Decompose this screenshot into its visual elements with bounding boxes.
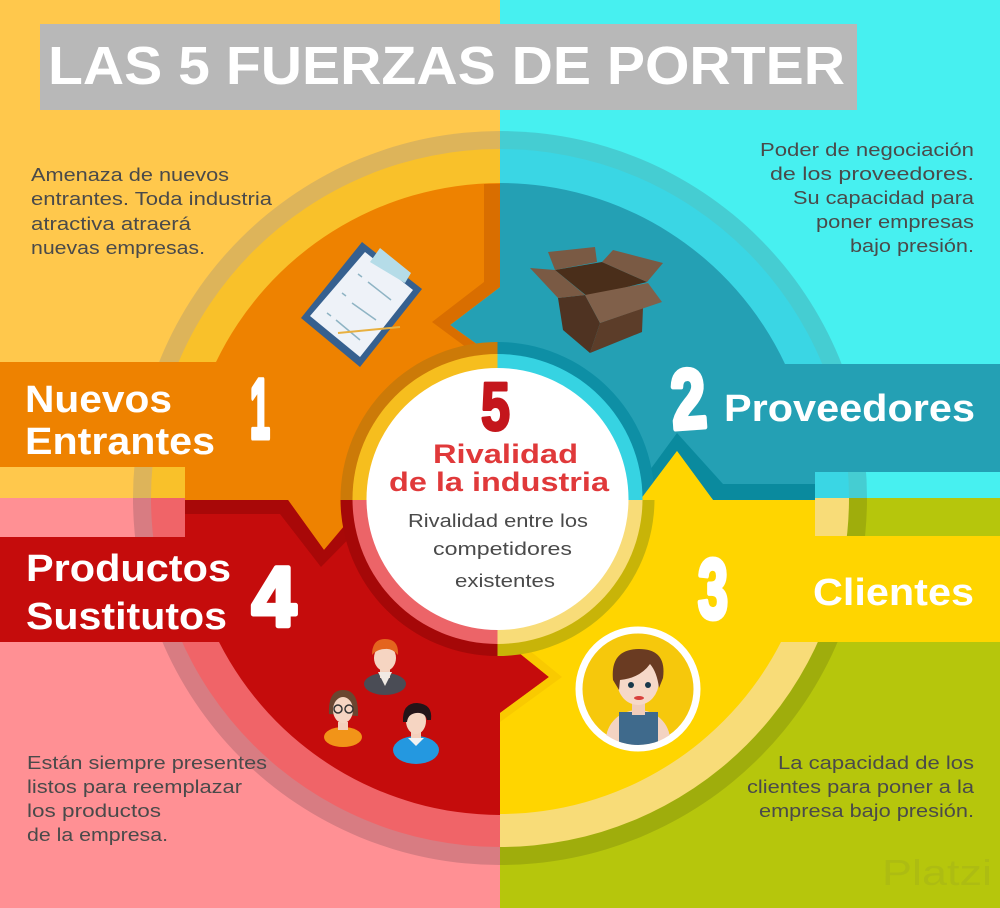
text block: proveedores description: de los proveedores. bbox=[770, 164, 974, 184]
text block: productos sustitutos description: listos para reemplazar bbox=[27, 777, 242, 797]
text block: productos sustitutos description: de la empresa. bbox=[27, 825, 168, 845]
icon: client portrait bbox=[579, 630, 697, 770]
heading: clientes: Clientes bbox=[813, 572, 974, 614]
watermark: Platzi bbox=[882, 852, 992, 893]
heading: productos sustitutos bbox=[26, 548, 231, 638]
icon: three people bbox=[324, 639, 439, 764]
text block: nuevos entrantes description bbox=[31, 165, 273, 258]
person: man in blue bbox=[393, 703, 439, 764]
text block: nuevos entrantes description: entrantes. Toda industria bbox=[31, 189, 273, 209]
text block: productos sustitutos description: los productos bbox=[27, 801, 161, 821]
outer ring bbox=[133, 131, 867, 865]
person: man in suit bbox=[364, 639, 406, 695]
heading: productos sustitutos: Productos bbox=[26, 548, 231, 590]
panel: proveedores shape bbox=[450, 183, 1000, 498]
title: LAS 5 FUERZAS DE PORTER bbox=[48, 36, 845, 96]
center ring bbox=[340, 342, 713, 656]
text block: clientes description: La capacidad de los bbox=[778, 753, 974, 773]
number 2: 2 bbox=[668, 351, 709, 447]
number 4: 4 bbox=[252, 550, 296, 644]
text block: clientes description: clientes para poner a la bbox=[747, 777, 975, 797]
center description: competidores bbox=[433, 539, 572, 559]
text block: proveedores description: bajo presión. bbox=[850, 236, 974, 256]
number 3: 3 bbox=[698, 542, 728, 636]
text block: proveedores description bbox=[760, 140, 975, 256]
text block: proveedores description: Poder de negociación bbox=[760, 140, 974, 160]
text block: productos sustitutos description bbox=[27, 753, 267, 845]
text block: proveedores description: Su capacidad para bbox=[793, 188, 975, 208]
heading: nuevos entrantes: Entrantes bbox=[25, 421, 215, 463]
text block: productos sustitutos description: Están siempre presentes bbox=[27, 753, 267, 773]
text block: nuevos entrantes description: nuevas empresas. bbox=[31, 238, 205, 258]
text: 1 bbox=[250, 362, 270, 456]
heading: productos sustitutos: Sustitutos bbox=[26, 596, 227, 638]
heading: proveedores: Proveedores bbox=[724, 388, 975, 430]
text block: clientes description bbox=[747, 753, 975, 821]
icon: clipboard bbox=[301, 242, 422, 367]
shadows between panels bbox=[185, 184, 815, 722]
panel: productos sustitutos shape bbox=[0, 500, 549, 815]
center heading bbox=[389, 369, 610, 497]
text block: nuevos entrantes description: atractiva atraerá bbox=[31, 214, 192, 234]
person: woman with glasses bbox=[324, 690, 362, 747]
text block: clientes description: empresa bajo presión. bbox=[759, 801, 974, 821]
title bbox=[40, 24, 857, 110]
icon: cardboard box bbox=[530, 247, 663, 353]
text block: nuevos entrantes description: Amenaza de nuevos bbox=[31, 165, 229, 185]
center heading: 5 bbox=[481, 369, 510, 445]
center description: existentes bbox=[455, 571, 555, 591]
center heading: de la industria bbox=[389, 467, 610, 497]
center description: Rivalidad entre los bbox=[408, 511, 588, 531]
center description bbox=[408, 511, 588, 591]
panel: clientes shape bbox=[500, 451, 1000, 814]
heading: nuevos entrantes: Nuevos bbox=[25, 379, 172, 421]
center heading: Rivalidad bbox=[433, 439, 578, 469]
panel: nuevos entrantes shape bbox=[0, 183, 500, 550]
text block: proveedores description: poner empresas bbox=[816, 212, 974, 232]
heading: nuevos entrantes bbox=[25, 379, 215, 463]
